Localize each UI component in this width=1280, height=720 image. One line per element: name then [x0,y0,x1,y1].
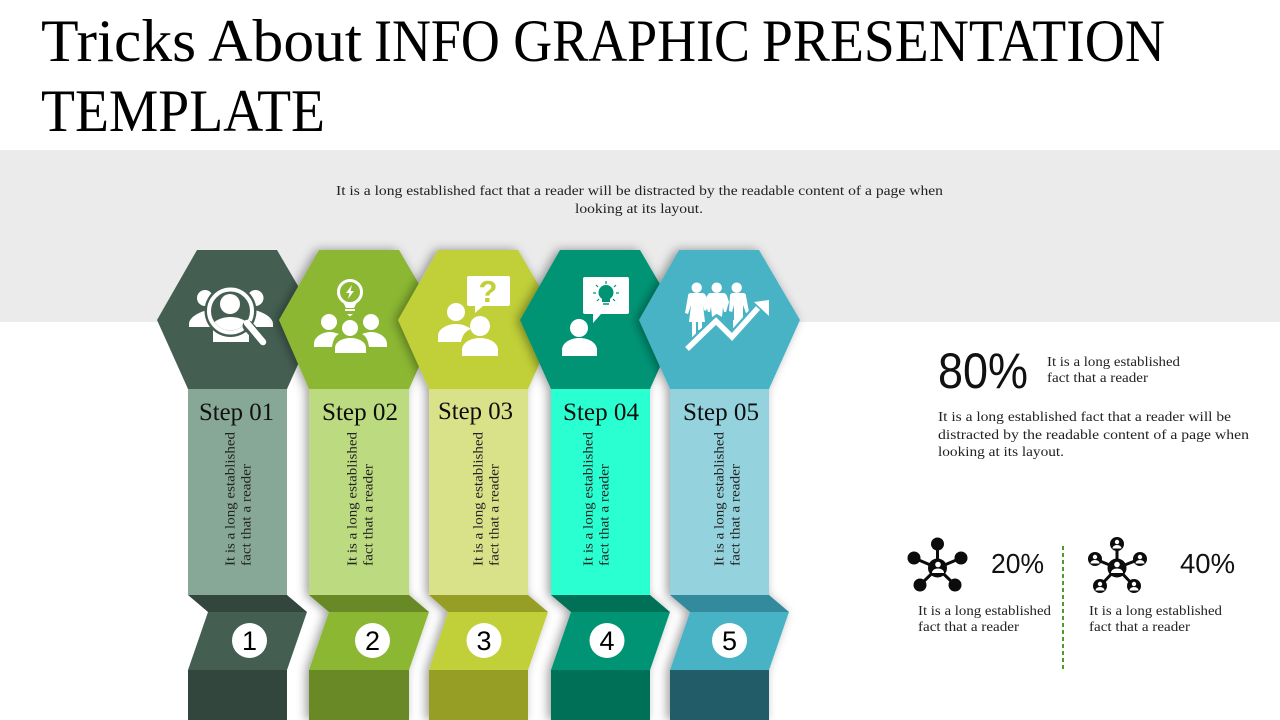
step 1 ribbon [188,612,307,670]
step 3 hexagon [398,250,559,389]
intro text [336,184,943,217]
step 1 description [224,432,254,566]
stat: 40 percent: 40% [1180,548,1235,579]
icon: network 20 percent [908,538,968,592]
step 1 base [188,670,287,720]
step 5 description [712,432,744,566]
step 3 fold [429,595,548,612]
step 1 hexagon [157,250,318,389]
step 4 description: It is a long established [582,432,596,566]
step 3 description: It is a long established [472,432,486,566]
stat 40 caption: fact that a reader [1089,620,1190,635]
step 5 fold [670,595,789,612]
stat: 80 percent: 80% [938,343,1028,399]
step 3 base [429,670,528,720]
step 3 label: Step 03 [438,398,513,425]
icon: people search [189,285,273,342]
icon: team growth [685,282,769,349]
panel: step 3 [398,250,559,720]
step 1 description: fact that a reader [240,464,254,566]
title: Tricks About [41,8,362,74]
step 1 fold [188,595,307,612]
panel: step 4 [520,250,681,720]
step 1 number: 1 [242,626,257,656]
icon: network 40 percent [1088,537,1147,593]
step 2 base [309,670,409,720]
step 5 description: fact that a reader [728,464,744,566]
step 1 description: It is a long established [224,432,238,566]
stat: 20 percent: 20% [991,548,1044,579]
title: PRESENTATION [762,8,1165,74]
step 4 description [582,432,612,566]
step 2 hexagon [279,250,440,389]
step 3 description: fact that a reader [488,464,502,566]
step 4 ribbon [551,612,670,670]
step 3 ribbon [429,612,548,670]
icon: people question: ? [479,274,497,309]
step 4 label: Step 04 [563,399,639,426]
stat 20 caption: It is a long established [918,604,1051,619]
step 5 bar [670,389,769,595]
step 3 number [466,623,502,658]
step 5 ribbon [670,612,789,670]
step 5 hexagon [639,250,800,389]
step 2 number [355,623,390,658]
intro text: It is a long established fact that a reader will be distracted by the readable content of a page when [336,184,943,199]
panel: step 5 [639,250,800,720]
step 2 description: fact that a reader [362,464,376,566]
step 5 base [670,670,769,720]
step 3 number: 3 [476,626,492,656]
step 5 number [712,623,747,658]
step 2 label: Step 02 [322,399,398,426]
step 2 fold [309,595,429,612]
step 4 bar [551,389,650,595]
stat 20 caption: fact that a reader [918,620,1019,635]
panel: step 2 [279,250,440,720]
title: TEMPLATE [41,78,325,144]
icon: people question [438,274,510,356]
step 4 fold [551,595,670,612]
panel: step 1 [157,250,318,720]
stat 20 caption [918,604,1051,635]
title: INFO GRAPHIC [374,8,750,74]
paragraph: It is a long established fact that a reader will be [938,410,1231,425]
step 3 description [472,432,502,566]
stat 80 caption: fact that a reader [1047,371,1148,386]
intro text: looking at its layout. [575,202,703,217]
paragraph: distracted by the readable content of a page when [938,428,1249,443]
step 3 bar [429,389,528,595]
step 4 base [551,670,650,720]
step 2 description: It is a long established [346,432,360,566]
divider [1062,546,1064,670]
step 2 number: 2 [365,626,380,656]
stat 80 caption [1047,355,1180,386]
stat 40 caption [1089,604,1222,635]
paragraph: looking at its layout. [938,445,1064,460]
step 1 label: Step 01 [199,399,274,426]
step 1 bar [188,389,287,595]
step 5 label: Step 05 [683,399,759,426]
background band [0,150,1280,322]
stat 80 caption: It is a long established [1047,355,1180,370]
stat 40 caption: It is a long established [1089,604,1222,619]
step 2 ribbon [309,612,429,670]
step 4 number: 4 [599,626,615,656]
title [41,8,1165,144]
step 5 description: It is a long established [712,432,728,566]
step 2 bar [309,389,409,595]
step 5 number: 5 [722,626,737,656]
step 4 description: fact that a reader [598,464,612,566]
step 4 number [590,623,624,658]
step 1 number [232,623,267,658]
step 4 hexagon [520,250,681,389]
icon: team idea [314,280,387,353]
icon: person with idea [562,277,629,356]
paragraph [938,410,1249,460]
step 2 description [346,432,376,566]
